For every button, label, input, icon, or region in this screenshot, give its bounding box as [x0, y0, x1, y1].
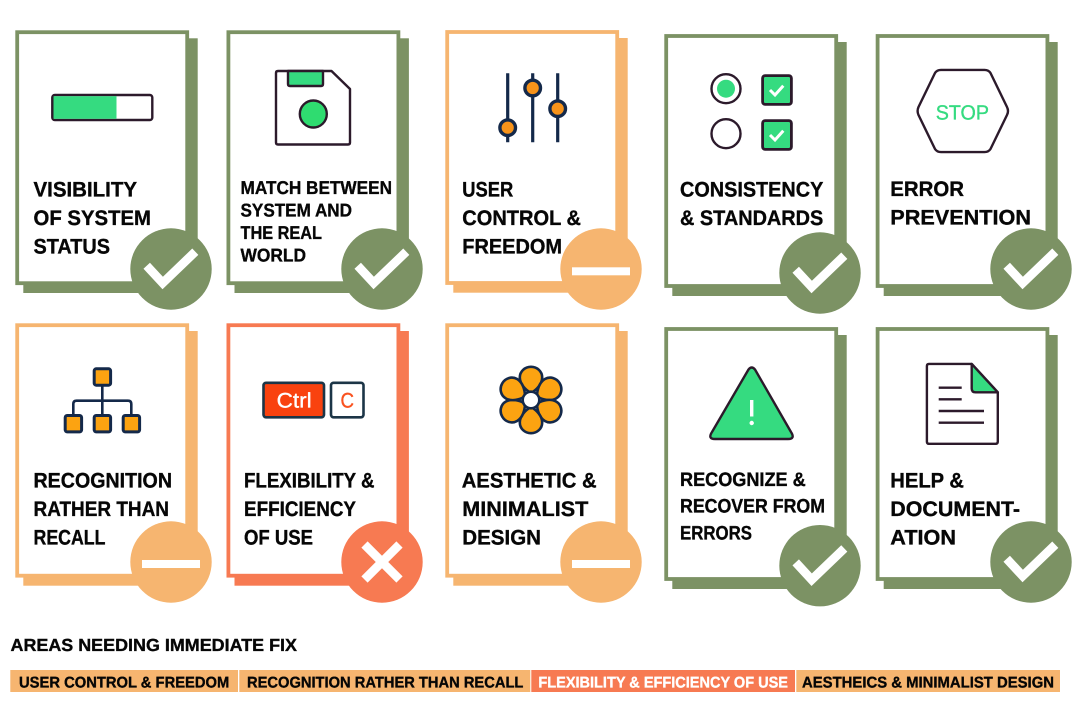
- heading: user control and freedom: CONTROL &: [462, 207, 581, 230]
- heading: flexibility and efficiency of use: OF USE: [244, 526, 313, 549]
- icon: minus badge: [130, 521, 212, 603]
- icon: radio buttons and checkboxes: [712, 74, 791, 149]
- heading: match between system and the real world: THE REAL: [240, 222, 322, 243]
- heading: help and documentation: HELP &: [890, 470, 964, 493]
- heading: match between system and the real world: [240, 177, 392, 266]
- heading: visibility of system status: OF SYSTEM: [34, 207, 151, 230]
- panel: flexibility and efficiency of use: [228, 325, 423, 603]
- panel: recognition rather than recall: [17, 325, 212, 603]
- heading: match between system and the real world: MATCH BETWEEN: [240, 177, 392, 198]
- heading: recognize and recover from errors: RECOVER FROM: [680, 496, 825, 518]
- icon: document: [927, 364, 998, 444]
- panel: match between system and the real world: [228, 32, 423, 310]
- heading: match between system and the real world: WORLD: [240, 245, 306, 266]
- heading: consistency and standards: & STANDARDS: [680, 207, 823, 230]
- icon: sliders: [500, 73, 566, 142]
- heading: recognize and recover from errors: ERRORS: [680, 522, 752, 544]
- heading: consistency and standards: CONSISTENCY: [680, 179, 823, 202]
- icon: check badge: [990, 228, 1072, 310]
- heading: consistency and standards: [680, 179, 823, 230]
- heading: help and documentation: ATION: [890, 526, 956, 549]
- heading: aesthetic and minimalist design: AESTHETIC &: [462, 470, 597, 493]
- panel: consistency and standards: [666, 36, 861, 314]
- heading: recognize and recover from errors: RECOGNIZE &: [680, 469, 806, 491]
- icon: ctrl c keys: [264, 383, 364, 417]
- heading: recognize and recover from errors: [680, 469, 825, 544]
- heading: help and documentation: DOCUMENT-: [890, 498, 1020, 521]
- heading: user control and freedom: USER: [462, 179, 513, 202]
- heading: aesthetic and minimalist design: MINIMALIST: [462, 498, 588, 521]
- heading: recognition rather than recall: [34, 470, 172, 549]
- icon: check badge: [779, 525, 861, 606]
- heading: match between system and the real world: SYSTEM AND: [240, 200, 352, 221]
- icon: flower: [497, 367, 565, 433]
- icon: hierarchy: [65, 369, 140, 432]
- icon: stop sign: STOP: [936, 101, 989, 124]
- tag: recognition rather than recall: RECOGNITION RATHER THAN RECALL: [247, 674, 523, 691]
- icon: check badge: [779, 232, 861, 314]
- icon: floppy disk: [276, 71, 350, 144]
- heading: user control and freedom: [462, 179, 581, 258]
- heading: error prevention: ERROR: [890, 178, 964, 201]
- icon: ctrl c keys: C: [340, 390, 354, 413]
- icon: minus badge: [560, 228, 642, 310]
- icon: check badge: [341, 228, 423, 310]
- panel: visibility of system status: [17, 32, 212, 310]
- heading: flexibility and efficiency of use: FLEXIBILITY &: [244, 470, 374, 493]
- icon: ctrl c keys: Ctrl: [277, 390, 312, 413]
- heading: aesthetic and minimalist design: DESIGN: [462, 526, 541, 549]
- heading: recognition rather than recall: RECOGNITION: [34, 470, 172, 493]
- tag: aesthetics and minimalist design: AESTHEICS & MINIMALIST DESIGN: [802, 674, 1054, 691]
- heading: visibility of system status: STATUS: [34, 235, 110, 258]
- heading: error prevention: PREVENTION: [890, 206, 1031, 229]
- icon: check badge: [990, 521, 1072, 603]
- icon: warning triangle: [710, 368, 793, 439]
- heading: help and documentation: [890, 470, 1020, 549]
- heading: aesthetic and minimalist design: [462, 470, 597, 549]
- heading: recognition rather than recall: RECALL: [34, 526, 106, 549]
- heading: flexibility and efficiency of use: [244, 470, 374, 549]
- icon: stop sign: [918, 70, 1008, 152]
- panel: recognize and recover from errors: [666, 329, 861, 606]
- icon: minus badge: [560, 521, 642, 603]
- heading: recognition rather than recall: RATHER THAN: [34, 498, 169, 521]
- panel: error prevention: [878, 36, 1072, 310]
- heading: user control and freedom: FREEDOM: [462, 235, 562, 258]
- tag: flexibility and efficiency of use: FLEXIBILITY & EFFICIENCY OF USE: [538, 674, 788, 691]
- tag: user control and freedom: USER CONTROL & FREEDOM: [19, 674, 229, 691]
- panel: user control and freedom: [447, 32, 642, 310]
- icon: check badge: [130, 228, 212, 310]
- panel: aesthetic and minimalist design: [447, 325, 642, 603]
- icon: cross badge: [341, 521, 423, 603]
- heading: visibility of system status: VISIBILITY: [34, 179, 137, 202]
- icon: progress bar: [52, 95, 152, 120]
- heading: areas needing immediate fix: AREAS NEEDING IMMEDIATE FIX: [10, 635, 297, 655]
- panel: help and documentation: [878, 329, 1072, 603]
- heading: visibility of system status: [34, 179, 151, 258]
- heading: error prevention: [890, 178, 1031, 229]
- heading: flexibility and efficiency of use: EFFICIENCY: [244, 498, 356, 521]
